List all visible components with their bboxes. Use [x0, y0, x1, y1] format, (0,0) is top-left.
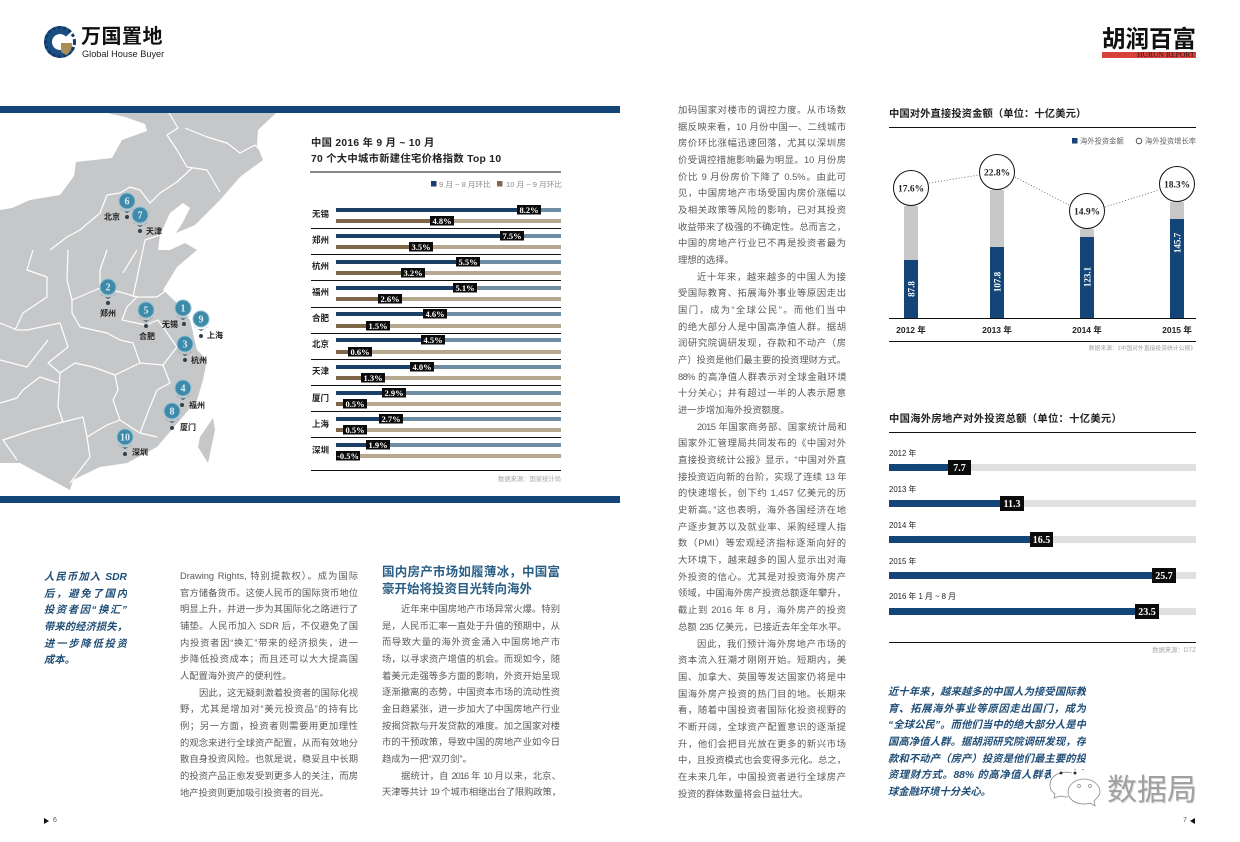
row 2016: 2016 年 1 月 ~ 8 月: [889, 591, 956, 601]
row 2014: [889, 520, 1196, 547]
text column 3: 大环境下，越来越多的国人显示出对海: [678, 555, 846, 565]
column 2015: 2015 年: [1162, 325, 1192, 335]
text column 2: 是，人民币汇率一直处于升值的预期中，从: [382, 621, 560, 631]
pin 7 Tianjin: [132, 207, 162, 236]
row: 郑州: 7.5%: [502, 231, 522, 241]
row: 杭州: 杭州: [312, 261, 329, 271]
callout: RMB joining SDR: 后，避免了国内: [44, 589, 127, 600]
pin 5 Hefei: 5: [144, 306, 148, 316]
text column 1: 例；另一方面，投资者则需要用更加理性: [180, 721, 358, 731]
row: 郑州: 郑州: [312, 235, 329, 245]
section heading: 豪开始将投资目光转向海外: [382, 582, 532, 596]
pin 6 Beijing: 6: [124, 196, 130, 208]
row: 厦门: 0.5%: [345, 399, 365, 409]
text column 2: 逐渐撤离的态势，中国资本市场的流动性资: [382, 687, 560, 697]
legend: 10 月 ~ 9 月环比: [506, 179, 562, 189]
column 2012: [894, 170, 928, 335]
text column 2: 着美元走强等多方面的影响，外资开始呈现: [382, 671, 560, 681]
text column 1: 内投资者因“换汇”带来的经济损失，进一: [180, 638, 358, 648]
column 2013: 2013 年: [982, 325, 1012, 335]
legend: 海外投资增长率: [1145, 136, 1196, 146]
pin 3 Hangzhou: 杭州: [191, 355, 207, 365]
pin 5 Hefei: 合肥: [139, 331, 155, 341]
text column 3: 近十年来，越来越多的中国人为接: [697, 272, 846, 282]
text column 3: 因此，我们预计海外房地产市场的: [697, 638, 846, 648]
pin 7 Tianjin: 天津: [146, 226, 162, 236]
row 2013: 2013 年: [889, 484, 917, 494]
source note: 数据来源：国家统计局: [498, 474, 561, 483]
pin 7 Tianjin: 7: [138, 210, 142, 222]
text column 3: 加码国家对楼市的调控力度。从市场数: [678, 105, 846, 115]
row: 无锡: 无锡: [312, 209, 330, 219]
callout: global citizens: 款和不动产（房产）投资是他们最主要的投: [888, 754, 1086, 765]
column 2014: 123.1: [1082, 266, 1092, 287]
text column 1: 步降低投资成本；而且还可以大大提高国: [180, 654, 358, 664]
section heading: 国内房产市场如履薄冰，中国富: [382, 565, 560, 579]
legend: 9 月 ~ 8 月环比: [439, 179, 491, 189]
text column 3: 接投资迈向新的台阶，实现了连续 13 年: [678, 472, 846, 482]
text column 3: 产逐步复苏以及就业率、采购经理人指: [678, 522, 846, 532]
callout: global citizens: 球金融环境十分关心。: [888, 787, 991, 798]
row: 福州: 福州: [312, 287, 329, 297]
pin 5 Hefei: [138, 302, 155, 341]
legend: [1072, 136, 1196, 146]
row: 上海: 上海: [312, 419, 330, 429]
row: 北京: 4.5%: [423, 335, 443, 345]
column 2015: [1160, 166, 1194, 335]
legend: 海外投资金额: [1080, 136, 1124, 146]
pin 9 Shanghai: 9: [198, 314, 204, 326]
text column 3: 国海外房产投资的热门目的地。长期来: [678, 689, 846, 699]
text column 3: 价比 9 月份房价下降了 0.5%。由此可: [678, 172, 846, 182]
callout: global citizens: “全球公民”。而他们当中的绝大部分人是中: [888, 720, 1086, 731]
pin 6 Beijing: 北京: [104, 212, 120, 222]
callout: RMB joining SDR: 人民币加入 SDR: [44, 572, 127, 583]
row: 天津: 1.3%: [363, 373, 383, 383]
column 2012: 17.6%: [898, 184, 924, 194]
text column 3: 国门，成为“全球公民”。而他们当中: [678, 305, 846, 315]
row: 杭州: 3.2%: [403, 268, 423, 278]
row: 福州: 2.6%: [380, 294, 400, 304]
text column 1: 铺垫。人民币加入 SDR 后，不仅避免了国: [180, 621, 358, 631]
row: 北京: [312, 335, 561, 357]
row 2014: 16.5: [1033, 535, 1050, 546]
row: 厦门: 2.9%: [384, 388, 404, 398]
row: 无锡: 8.2%: [519, 205, 539, 215]
text column 2: 趋成为一把“双刃剑”。: [382, 754, 472, 764]
logo: Hurun Report: HURUN REPORT: [1137, 50, 1195, 59]
text column 3: 受国际教育、拓展海外事业等原因走出: [678, 288, 846, 298]
text column 1: 的观念来进行全球资产配置，从而有效地分: [180, 738, 358, 748]
chart title: 中国 2016 年 9 月 ~ 10 月: [311, 136, 435, 149]
column 2014: 14.9%: [1074, 208, 1100, 218]
source note: 数据来源：《中国对外直接投资统计公报》: [1089, 344, 1196, 352]
text column 2: 市的干预政策，导致中国的房地产业如今日: [382, 737, 560, 747]
callout: global citizens: 近十年来，越来越多的中国人为接受国际教: [888, 687, 1086, 698]
column 2014: [1070, 194, 1104, 335]
pin 1 Wuxi: 无锡: [162, 319, 178, 329]
row: 北京: 北京: [312, 339, 329, 349]
text column 2: 近年来中国房地产市场异常火爆。特别: [401, 604, 560, 614]
page number 6: 6: [53, 817, 57, 824]
row 2015: [889, 556, 1196, 583]
row: 郑州: 3.5%: [411, 242, 431, 252]
row 2015: 2015 年: [889, 556, 917, 566]
chart title: [311, 136, 501, 165]
text column 3: 的绝大部分人是中国高净值人群。据胡: [678, 322, 846, 332]
text column 3: 收益带来了极强的不确定性。总而言之，: [678, 222, 846, 232]
page number 7: [1183, 817, 1195, 824]
row 2012: 7.7: [953, 463, 966, 474]
text column 3: 国家外汇管理局共同发布的《中国对外: [678, 438, 846, 448]
column 2013: [980, 154, 1014, 335]
column 2012: 87.8: [906, 281, 916, 297]
text column 3: 产）投资是他们最主要的投资理财方式。: [678, 355, 846, 365]
callout: RMB joining SDR: 进一步降低投资: [44, 639, 127, 650]
watermark: 数据局: 数据局: [1107, 765, 1197, 809]
page number 6: [44, 817, 57, 824]
pin 8 Xiamen: [164, 403, 196, 432]
text column 2: 金日趋紧张，进一步加大了中国房地产行业: [382, 704, 560, 714]
text column 3: 的快速增长，创下约 1,457 亿美元的历: [678, 488, 846, 498]
text column 1: 明显上升，并进一步为其国际化之路进行了: [180, 604, 358, 614]
section heading: [382, 565, 560, 596]
row 2013: 11.3: [1004, 499, 1020, 510]
chart title: 70 个大中城市新建住宅价格指数 Top 10: [311, 152, 501, 165]
pin 8 Xiamen: 8: [170, 406, 174, 418]
text column 3: 升，他们会把目光放在更多的新兴市场: [678, 739, 846, 749]
row: 无锡: [312, 205, 561, 226]
text column 2: [382, 604, 560, 797]
row: 深圳: 深圳: [312, 445, 329, 455]
column 2015: 18.3%: [1164, 180, 1190, 190]
chart: new home price index Top 10: [310, 136, 562, 483]
pin 2 Zhengzhou: 郑州: [100, 308, 116, 318]
text column 3: 投资的群体数量将会日益壮大。: [678, 789, 808, 799]
chart title: 中国海外房地产对外投资总额（单位：十亿美元）: [889, 412, 1122, 425]
text column 2: 而导致大量的海外资金涌入中国房地产市: [382, 637, 560, 647]
column 2014: 2014 年: [1072, 325, 1102, 335]
row: 杭州: [312, 257, 561, 278]
row: 厦门: 厦门: [312, 393, 329, 403]
text column 3: 领域，中国海外房产投资总额逐年攀升，: [678, 588, 846, 598]
column 2012: 2012 年: [896, 325, 926, 335]
text column 3: 价受调控措施影响最为明显。10 月份房: [678, 155, 846, 165]
pin 10 Shenzhen: 深圳: [132, 447, 148, 457]
text column 3: 见，中国房地产市场受国内房价涨幅以: [678, 188, 846, 198]
pin 10 Shenzhen: [117, 429, 148, 457]
text column 1: [180, 571, 358, 798]
text column 3: 据反映来看，10 月份中国一、二线城市: [678, 122, 846, 132]
text column 3: 2015 年国家商务部、国家统计局和: [697, 422, 846, 432]
row: 天津: [312, 362, 561, 383]
row: 上海: 2.7%: [381, 414, 401, 424]
pin 8 Xiamen: 厦门: [180, 422, 196, 432]
text column 3: 房价环比涨幅迅速回落，尤其以深圳房: [678, 138, 846, 148]
pin 2 Zhengzhou: [100, 279, 116, 318]
text column 1: 因此，这无疑刺激着投资者的国际化视: [199, 688, 358, 698]
text column 3: 截止到 2016 年 8 月，海外房产的投资: [678, 605, 846, 615]
text column 2: 按揭贷款与开发贷款的难度。加之国家对楼: [382, 721, 560, 731]
row: 郑州: [312, 231, 561, 252]
row: 厦门: [312, 388, 561, 409]
pin 3 Hangzhou: 3: [182, 340, 188, 350]
row: 合肥: [312, 309, 561, 331]
callout: RMB joining SDR: 带来的经济损失，: [44, 622, 127, 633]
callout: RMB joining SDR: 投资者因“换汇”: [44, 605, 127, 616]
pin 4 Fuzhou: 福州: [189, 400, 205, 410]
text column 2: 据统计，自 2016 年 10 月以来，北京、: [401, 771, 560, 781]
chart title: 中国对外直接投资金额（单位：十亿美元）: [889, 107, 1086, 120]
text column 3: 在未来几年，中国投资者进行全球房产: [678, 772, 846, 782]
connector dotted line: [929, 175, 1159, 207]
logo: Global House Buyer: [44, 26, 164, 59]
text column 3: 十分关心；并有超过一半的人表示愿意: [678, 388, 846, 398]
text column 1: 地产投资则更加吸引投资者的目光。: [180, 788, 329, 798]
row: 深圳: [312, 440, 561, 461]
text column 1: Drawing Rights, 特别提款权）。成为国际: [180, 571, 358, 581]
pin 4 Fuzhou: [175, 380, 205, 410]
row: 上海: 0.5%: [345, 425, 365, 435]
pin 3 Hangzhou: [177, 336, 207, 365]
column 2015: 145.7: [1172, 232, 1182, 253]
logo: Global House Buyer: 万国置地: [81, 26, 163, 48]
row: 上海: [312, 414, 561, 435]
map landmass: [0, 113, 276, 496]
chart: China outbound direct investment: [889, 107, 1196, 352]
row: 合肥: 合肥: [312, 313, 330, 323]
bottom blue band: [0, 496, 620, 503]
text column 1: 散自身投资风险。也就是说，稳妥且中长期: [180, 754, 358, 764]
row 2016: [889, 591, 1196, 619]
callout: global citizens: 资理财方式。88% 的高净值人群表示对全: [888, 770, 1086, 781]
row: 合肥: 1.5%: [368, 321, 388, 331]
callout: global citizens: [888, 686, 1086, 798]
row: 深圳: -0.5%: [337, 451, 359, 461]
text column 2: 场，以寻求资产增值的机会。而现如今，随: [382, 654, 560, 664]
text column 3: 中，且投资模式也会变得多元化。总之，: [678, 755, 846, 765]
row 2013: [889, 484, 1196, 511]
column 2013: 22.8%: [984, 168, 1010, 178]
callout: RMB joining SDR: 成本。: [44, 655, 75, 666]
text column 1: 的投资产品正愈发受到更多人的关注，而房: [180, 771, 358, 781]
legend: [431, 179, 562, 189]
text column 1: 野，尤其是增加对“美元投资品”的持有比: [180, 704, 358, 714]
row: 杭州: 5.5%: [458, 257, 478, 267]
map of eastern China with city pins: [0, 113, 276, 490]
row 2012: 2012 年: [889, 448, 917, 458]
pin 2 Zhengzhou: 2: [106, 282, 110, 294]
text column 3: 数（PMI）等宏观经济指标逐渐向好的: [678, 538, 846, 548]
row: 福州: [312, 283, 561, 304]
text column 3: 及相关政策等风险的影响，已对其投资: [678, 205, 846, 215]
pin 9 Shanghai: 上海: [207, 330, 223, 340]
row: 北京: 0.6%: [350, 347, 370, 357]
text column 1: 人配置海外资产的便利性。: [180, 671, 292, 681]
row 2015: 25.7: [1155, 571, 1173, 582]
text column 3: 不断开阔，全球资产配置意识的逐渐提: [678, 722, 846, 732]
text column 3: 88% 的高净值人群表示对全球金融环境: [678, 372, 846, 382]
watermark: WeChat icon: [1050, 770, 1100, 807]
separators: [311, 228, 561, 470]
logo: Hurun Report: 胡润百富: [1102, 26, 1196, 52]
pin 6 Beijing: [104, 193, 135, 222]
text column 3: 看，随着中国投资者国际化投资视野的: [678, 705, 846, 715]
chart: overseas real estate investment: [889, 412, 1196, 654]
row: 合肥: 4.6%: [425, 309, 445, 319]
page number 7: 7: [1183, 817, 1187, 824]
row 2012: [889, 448, 1196, 475]
top blue band: [0, 106, 620, 113]
pin 4 Fuzhou: 4: [180, 384, 186, 394]
map province borders: [0, 113, 263, 483]
text column 3: 理想的选择。: [678, 255, 734, 265]
row: 深圳: 1.9%: [368, 440, 388, 450]
text column 3: 直接投资统计公报》显示，“中国对外直: [678, 455, 846, 465]
text column 3: 资本流入狂潮才刚刚开始。短期内，美: [678, 655, 846, 665]
row 2016: 23.5: [1138, 607, 1156, 618]
row: 无锡: 4.8%: [432, 216, 452, 226]
text column 2: 天津等共计 19 个城市相继出台了限购政策，: [382, 787, 560, 797]
row: 福州: 5.1%: [455, 283, 475, 293]
text column 3: 总额 235 亿美元，已接近去年全年水平。: [678, 622, 846, 632]
callout: RMB joining SDR: [44, 571, 127, 666]
pin 10 Shenzhen: 10: [120, 432, 130, 444]
text column 3: 国、加拿大、英国等发达国家仍将是中: [678, 672, 846, 682]
text column 3: [678, 105, 846, 799]
pin 9 Shanghai: [193, 311, 223, 340]
text column 3: 外投资的信心。尤其是对投资海外房产: [678, 572, 846, 582]
column 2013: 107.8: [992, 271, 1002, 292]
text column 3: 润研究院调研发现，存款和不动产（房: [678, 338, 846, 348]
row: 天津: 天津: [312, 366, 330, 376]
text column 1: 官方储备货币。这使人民币的国际货币地位: [180, 588, 358, 598]
row: 天津: 4.0%: [412, 362, 432, 372]
row 2014: 2014 年: [889, 520, 917, 530]
logo: Global House Buyer: Global House Buyer: [82, 49, 164, 59]
text column 3: 中国的房地产行业已不再是投资者最为: [678, 238, 846, 248]
callout: global citizens: 育、拓展海外事业等原因走出国门，成为: [888, 704, 1086, 715]
text column 3: 进一步增加海外投资额度。: [678, 405, 790, 415]
pin 1 Wuxi: [162, 300, 191, 329]
text column 3: 史新高。”这也表明，海外各国经济在地: [678, 505, 846, 515]
pin 1 Wuxi: 1: [180, 304, 186, 314]
source note: 数据来源：DTZ: [1152, 645, 1196, 654]
callout: global citizens: 国高净值人群。据胡润研究院调研发现，存: [888, 737, 1086, 748]
